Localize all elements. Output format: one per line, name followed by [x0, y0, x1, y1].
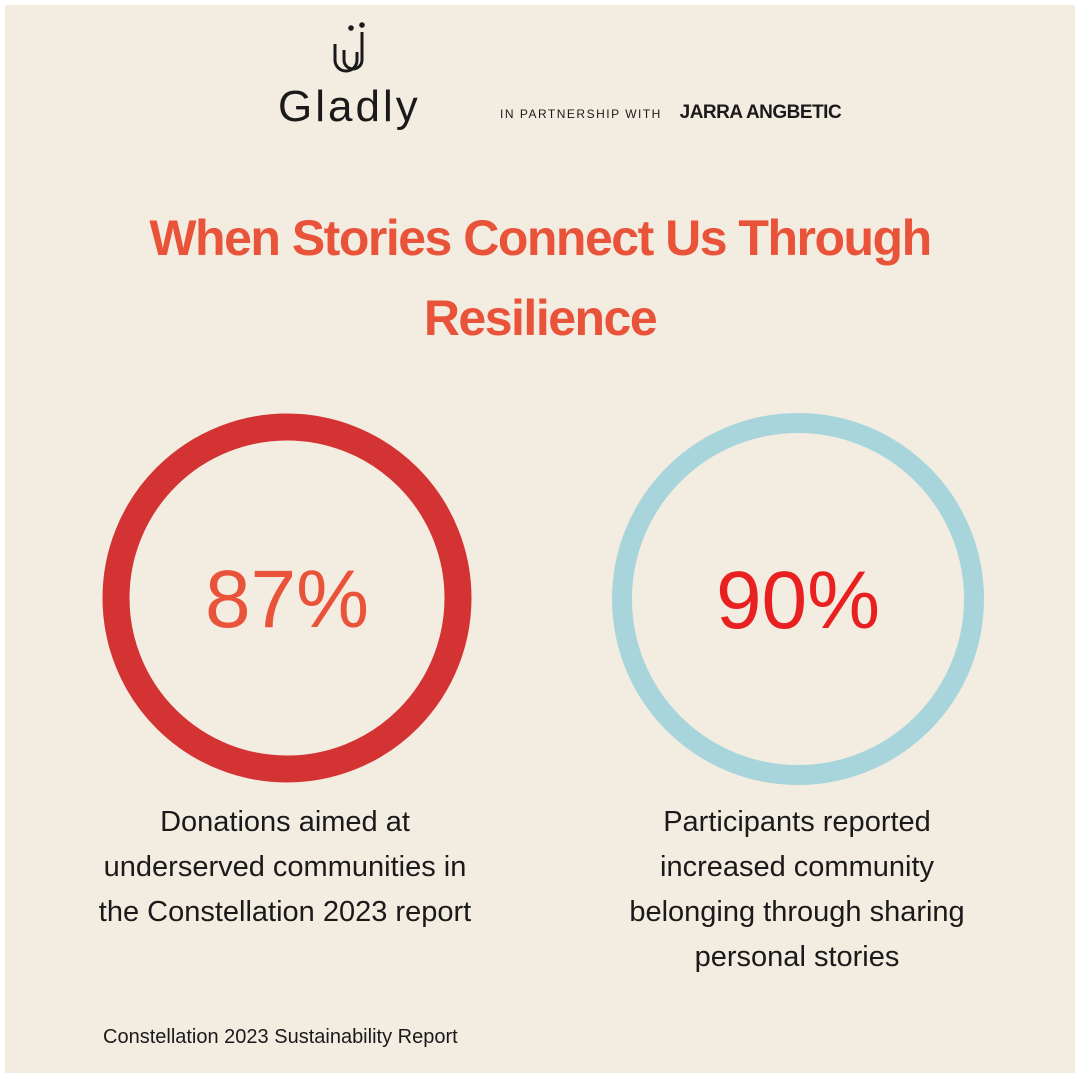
- stat circle: 90%: [612, 413, 984, 785]
- caption right: [629, 806, 965, 973]
- partnership line: IN PARTNERSHIP WITH JARRA ANGBETIC: [500, 102, 841, 123]
- stat circle: 87%: [102, 414, 472, 782]
- wordmark: Gladly: [278, 82, 421, 131]
- title: When Stories Connect Us Through: [149, 210, 931, 266]
- number 87%: 87%: [205, 554, 369, 645]
- caption right: Participants reported: [663, 806, 931, 838]
- caption right: personal stories: [695, 941, 899, 973]
- footer source: Constellation 2023 Sustainability Report: [103, 1026, 458, 1048]
- caption left: underserved communities in: [104, 851, 466, 883]
- caption right: increased community: [660, 851, 934, 883]
- caption left: Donations aimed at: [160, 806, 410, 838]
- caption left: the Constellation 2023 report: [99, 896, 471, 928]
- caption right: belonging through sharing: [629, 896, 965, 928]
- caption left: [99, 806, 471, 928]
- title: [149, 210, 931, 346]
- title: Resilience: [424, 290, 656, 346]
- number 90%: 90%: [716, 555, 880, 646]
- logo: Gladly: [278, 22, 421, 131]
- icon: Gladly mark: [334, 22, 365, 72]
